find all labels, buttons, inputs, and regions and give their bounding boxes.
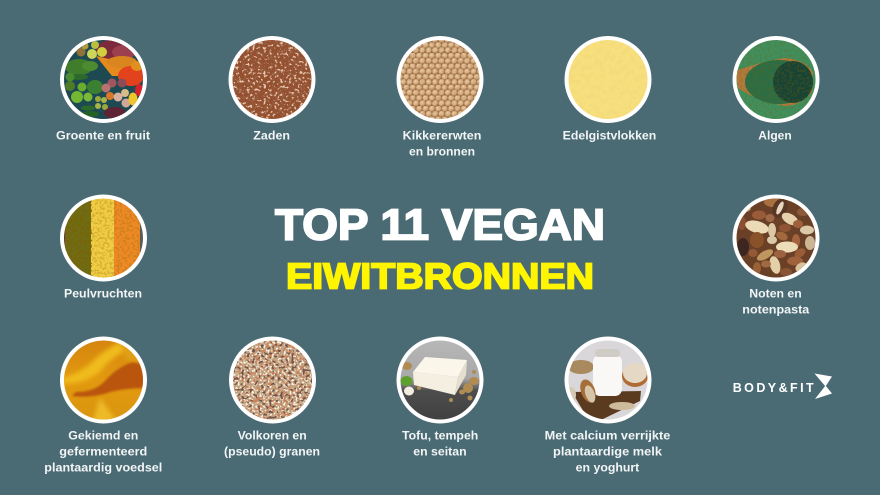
label: Groente en fruit <box>56 130 150 142</box>
label: Volkoren en <box>238 430 307 442</box>
item: Kikkererwten en bronnen <box>396 36 484 158</box>
label: Algen <box>758 130 792 142</box>
label <box>224 430 320 458</box>
label: en yoghurt <box>576 462 639 474</box>
label: (pseudo) granen <box>224 446 320 458</box>
label: Tofu, tempeh <box>402 430 478 442</box>
label <box>402 430 478 458</box>
label: plantaardig voedsel <box>44 462 162 474</box>
photo: mixed nuts <box>732 194 820 282</box>
photo: vegetables and fruit <box>60 36 148 124</box>
photo: quinoa grains <box>229 336 317 424</box>
label: en seitan <box>413 446 467 458</box>
photo: tofu block with soybeans <box>396 336 484 424</box>
item: Algen <box>732 36 820 142</box>
label <box>545 430 670 474</box>
photo: spirulina on a spoon <box>732 36 820 124</box>
item: Groente en fruit <box>56 36 150 142</box>
label: plantaardige melk <box>553 446 663 458</box>
label: Gekiemd en <box>68 430 138 442</box>
photo: nutritional yeast <box>564 36 652 124</box>
item: Zaden <box>228 36 316 142</box>
label <box>403 130 481 158</box>
label <box>44 430 162 474</box>
item: Edelgistvlokken <box>563 36 656 142</box>
logo: Body&Fit <box>733 374 832 399</box>
item: Peulvruchten <box>60 194 148 300</box>
item: Volkoren en (pseudo) granen <box>224 336 320 458</box>
label: Met calcium verrijkte <box>545 430 670 442</box>
title <box>275 202 605 296</box>
heading line 2: EIWITBRONNEN <box>286 256 594 296</box>
label: Noten en <box>749 288 802 300</box>
photo: chickpeas <box>396 36 484 124</box>
label <box>742 288 810 316</box>
item: Noten en notenpasta <box>732 194 820 316</box>
photo: plant milk jar on board <box>564 336 652 424</box>
heading line 1: TOP 11 VEGAN <box>275 202 605 250</box>
logo wordmark: BODY&FIT <box>733 381 814 395</box>
logo mark <box>814 374 832 399</box>
label: Peulvruchten <box>64 288 142 300</box>
label: notenpasta <box>742 304 810 316</box>
photo: pulses in stripes <box>60 194 148 282</box>
item: Gekiemd en gefermenteerd plantaardig voedsel <box>44 336 162 474</box>
label: Zaden <box>253 130 290 142</box>
item: Tofu, tempeh en seitan <box>396 336 484 458</box>
label: Kikkererwten <box>403 130 481 142</box>
label: Edelgistvlokken <box>563 130 656 142</box>
photo: fermented food <box>60 336 148 424</box>
item: Met calcium verrijkte plantaardige melk en yoghurt <box>545 336 670 474</box>
label: gefermenteerd <box>59 446 147 458</box>
label: en bronnen <box>409 146 475 158</box>
photo: flax seeds <box>228 36 316 124</box>
